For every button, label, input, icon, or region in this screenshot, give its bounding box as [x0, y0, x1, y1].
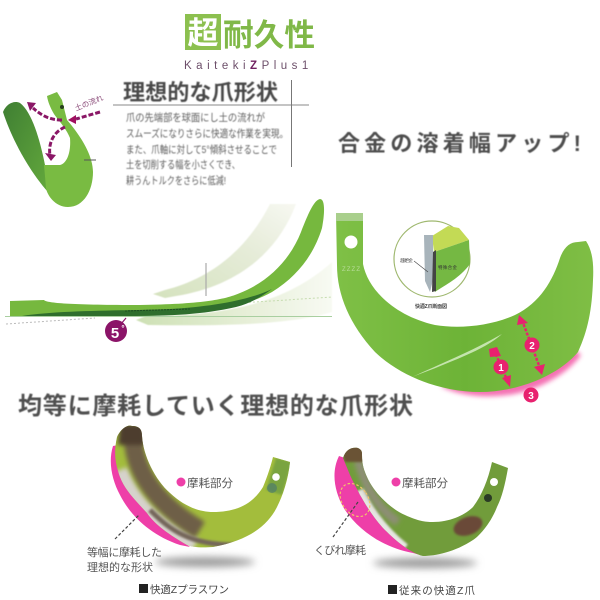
wear area pink — [334, 456, 424, 556]
section: ideal claw shape text — [123, 80, 288, 187]
arrow: upper pale airflow — [153, 204, 296, 298]
inset: welded alloy cross-section — [394, 221, 470, 310]
body text: スムーズになりさらに快適な作業を実現。 — [126, 127, 288, 140]
marker: 3: 3 — [528, 391, 534, 402]
title: super durability badge and wordmark — [184, 14, 315, 72]
blade: side view — [10, 199, 324, 316]
arrow: soil flow label and dashed arrows: 土の流れ — [73, 92, 105, 113]
marker: 1 — [489, 347, 511, 387]
heading: 理想的な爪形状: 理想的な爪形状 — [123, 80, 278, 105]
callout: even wear: 理想的な形状 — [87, 560, 153, 574]
bolt hole — [272, 473, 280, 481]
shadow — [373, 558, 477, 568]
illustration: 5 degree side profile — [5, 199, 332, 342]
badge: 5 degrees: ° — [121, 324, 125, 333]
marker: 3 — [524, 388, 538, 402]
bolt hole — [344, 236, 358, 248]
inset: welded alloy cross-section: 特殊合金 — [438, 264, 458, 271]
blade: worn body — [343, 448, 508, 556]
blade: light front face — [44, 92, 93, 207]
body text: 土を切削する幅を小さくでき、 — [126, 158, 240, 171]
illustration: claw front view with soil flow — [3, 92, 105, 207]
callout: even wear: 等幅に摩耗した — [87, 545, 162, 559]
wear area glow — [440, 350, 581, 396]
badge: 5 degrees: 5 — [111, 325, 119, 342]
legend: wear part: 摩耗部分 — [187, 477, 234, 490]
blade: dark back face — [3, 102, 48, 192]
shadow — [155, 557, 255, 567]
legend: wear part: 摩耗部分 — [402, 477, 448, 490]
badge: 超: 超 — [188, 16, 218, 51]
marker: 2 — [517, 315, 545, 375]
blade: worn body — [115, 426, 290, 548]
caption: 快適Zプラスワン — [150, 583, 229, 596]
engraved mark: ZZZZ — [342, 267, 360, 273]
subtitle: Kaiteki Z Plus 1: KaitekiZPlus1 — [184, 60, 313, 72]
illustration: large claw with wear markers — [336, 213, 593, 402]
callout: necking wear — [314, 502, 366, 557]
heading: wider alloy welding: 合金の溶着幅アップ! — [338, 131, 581, 156]
highlight streak — [412, 334, 502, 377]
inset: blade faces — [432, 226, 469, 252]
body text — [126, 111, 288, 187]
badge: 5 degrees — [105, 318, 127, 342]
arrow: lower pale airflow — [136, 262, 332, 325]
body text: 耕うんトルクをさらに低減! — [126, 174, 226, 187]
blade: main body — [336, 213, 593, 392]
marker: 1: 1 — [498, 363, 504, 374]
wear area pink — [111, 445, 190, 547]
illustration: conventional worn claw — [314, 440, 515, 597]
heading: wearing evenly: 均等に摩耗していく理想的な爪形状 — [18, 393, 413, 420]
illustration: Kaiteki Z Plus One worn claw — [87, 420, 295, 596]
body text: また、爪軸に対して5°傾斜させることで — [126, 143, 277, 156]
inset caption: 快適Z爪断面図 — [415, 303, 447, 310]
inset: callout labels: 超硬合金 — [400, 257, 414, 264]
callout: even wear — [87, 515, 162, 574]
callout: necking wear: くびれ摩耗 — [314, 544, 366, 557]
caption: 従来の快適Z爪 — [399, 584, 476, 597]
marker: 2: 2 — [529, 341, 535, 352]
heading: 耐久性: 耐久性 — [223, 18, 315, 53]
necking wear dashed ring — [334, 478, 376, 522]
body text: 爪の先端部を球面にし土の流れが — [126, 111, 265, 124]
